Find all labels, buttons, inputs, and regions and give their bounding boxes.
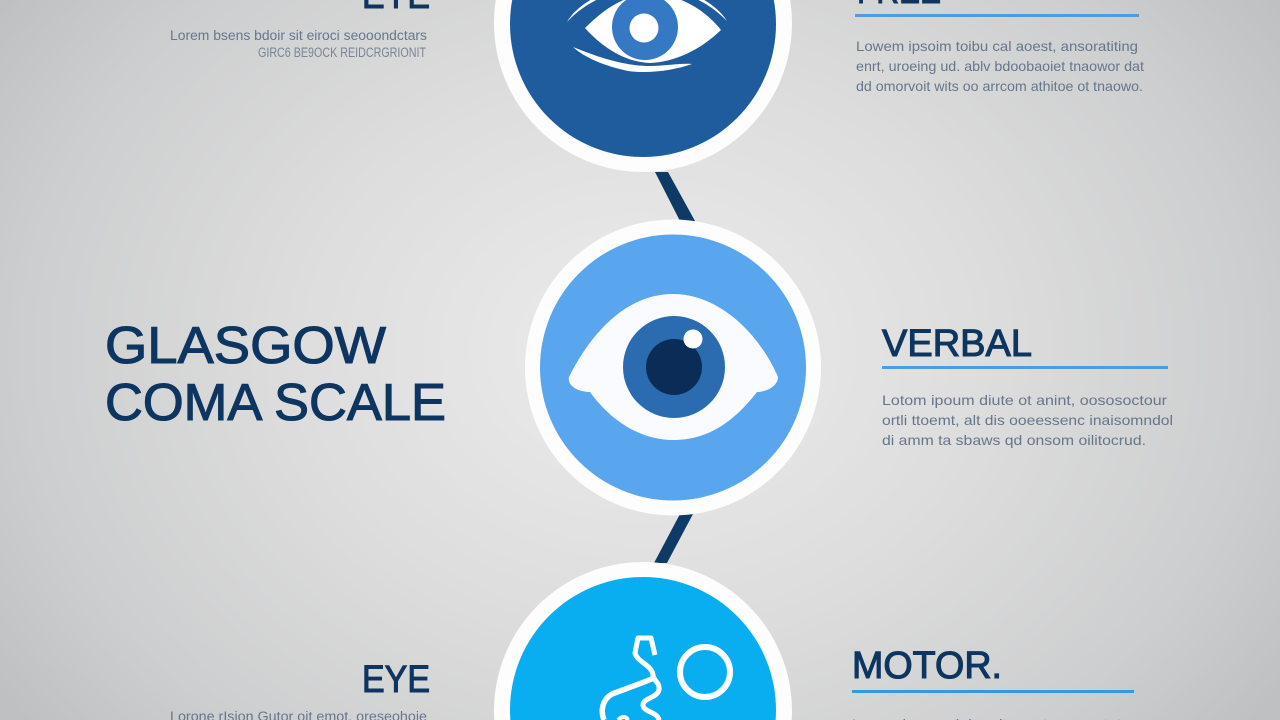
connector: top to middle (655, 172, 695, 221)
panel: top right heading: Lowem ipsoim toibu cal aoest, ansoratiting (856, 38, 1138, 54)
panel: top left eye: GIRC6 BE9OCK REIDCRGRIONIT (258, 45, 426, 60)
panel: top right heading (855, 0, 1144, 94)
title (105, 317, 446, 432)
circle: bottom motor icon (494, 562, 792, 720)
panel: top left eye: Lorem bsens bdoir sit eiroci seooondctars (170, 28, 427, 43)
title: GLASGOW (105, 317, 386, 375)
panel: verbal (882, 323, 1173, 448)
panel: bottom left eye (170, 659, 430, 720)
panel: verbal: VERBAL (882, 323, 1032, 365)
title: COMA SCALE (105, 374, 446, 432)
circle: top eye icon (494, 0, 792, 172)
panel: bottom left eye: EYE (362, 659, 430, 701)
panel: top right heading: dd omorvoit wits oo arrcom athitoe ot tnaowo. (856, 78, 1143, 94)
connector: middle to bottom (654, 514, 693, 563)
panel: verbal: ortli ttoemt, alt dis ooeessenc inaisomndol (882, 412, 1173, 428)
panel: motor (852, 645, 1136, 720)
circle: middle eye icon (525, 220, 821, 516)
panel: top right heading: enrt, uroeing ud. ablv bdoobaoiet tnaowor dat (856, 58, 1144, 74)
panel: verbal: di amm ta sbaws qd onsom oilitocrud. (882, 432, 1146, 448)
panel: verbal: Lotom ipoum diute ot anint, oososoctour (882, 392, 1167, 408)
panel: motor: MOTOR. (852, 645, 1002, 687)
panel: top left eye (170, 0, 430, 60)
